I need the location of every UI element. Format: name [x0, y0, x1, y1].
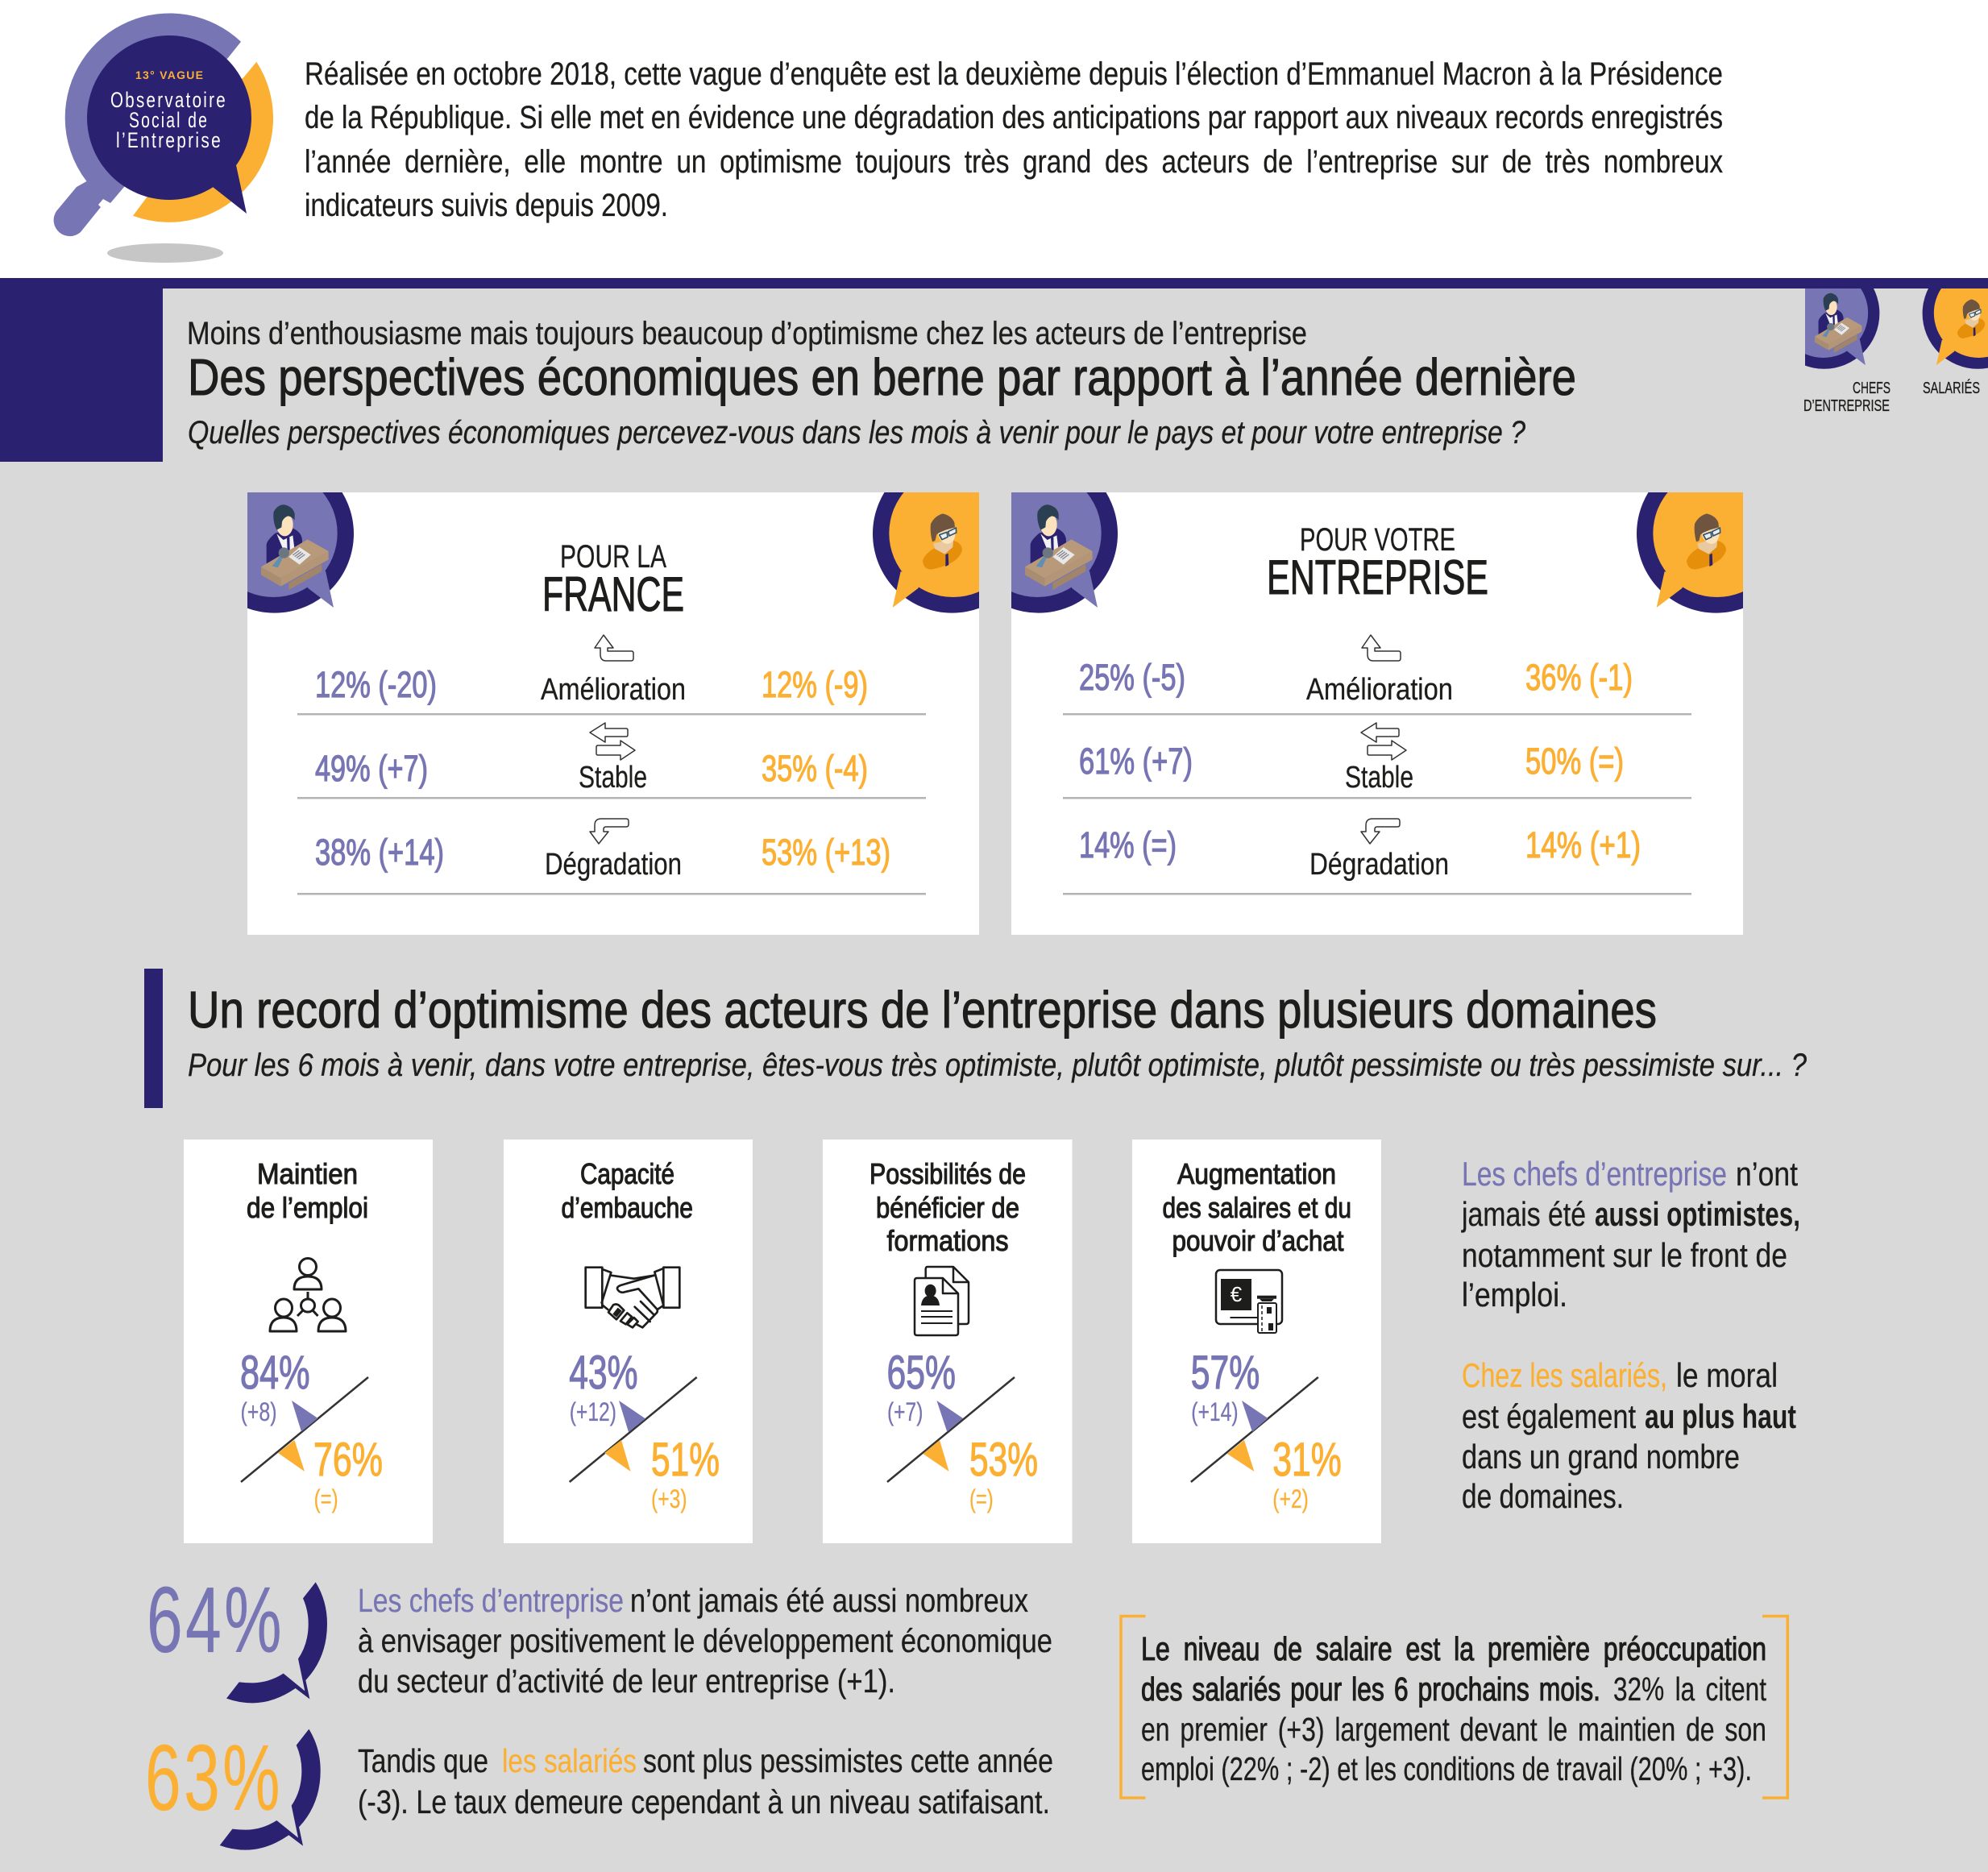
callout: niveau de salaire: en premier (+3) largement devant le maintien de son: [1141, 1711, 1766, 1748]
legend: salariés: [1923, 258, 1988, 397]
icon: handshake: [586, 1268, 679, 1327]
icon: salarié: [1637, 455, 1795, 613]
values: chefs vs salariés: (+2): [1272, 1484, 1309, 1513]
row: amélioration: [315, 635, 868, 707]
text block: commentary: jamais été: [1460, 1195, 1586, 1233]
card title: Capacité: [580, 1157, 674, 1190]
callout: niveau de salaire: Le niveau de salaire est la première préoccupation: [1141, 1630, 1766, 1667]
values: chefs vs salariés: (=): [314, 1484, 338, 1513]
icon: people network: [270, 1259, 346, 1331]
text block: commentary: est également: [1462, 1397, 1636, 1435]
row: dégradation: [315, 819, 890, 882]
values: chefs vs salariés: 57%: [1191, 1347, 1260, 1399]
callout: niveau de salaire: [1121, 1617, 1787, 1798]
legend: chefs d'entreprise: [1769, 258, 1890, 415]
row: amélioration: 12% (-9): [762, 664, 868, 705]
row: stable: Stable: [1345, 761, 1413, 795]
section heading: perspectives économiques: Des perspectives économiques en berne par rapport à l’année dernière: [188, 348, 1576, 406]
text block: chefs d'entreprise: à envisager positivement le développement économique: [358, 1622, 1052, 1659]
row: dégradation: Dégradation: [1309, 848, 1449, 882]
card: maintien de l'emploi: [184, 1139, 433, 1543]
panel: pour votre entreprise: [959, 455, 1795, 935]
section heading: perspectives économiques: Quelles perspectives économiques percevez-vous dans les mois à venir pour le pays et pour votre entreprise ?: [188, 415, 1526, 450]
section heading: record d'optimisme: [144, 969, 1807, 1108]
values: chefs vs salariés: 43%: [569, 1347, 638, 1399]
row: stable: 50% (=): [1525, 741, 1624, 782]
row: amélioration: Amélioration: [1306, 673, 1453, 707]
logo: Observatoire Social de l'Entreprise: 13° VAGUE: [135, 68, 203, 81]
values: chefs vs salariés: (=): [969, 1484, 994, 1513]
card title: [247, 1157, 368, 1224]
values: chefs vs salariés: (+12): [570, 1397, 616, 1426]
card title: Maintien: [257, 1157, 358, 1190]
values: chefs vs salariés: 76%: [313, 1434, 383, 1486]
text block: commentary: [1460, 1155, 1800, 1515]
row: amélioration: [1079, 635, 1633, 707]
panel heading: FRANCE: [542, 567, 684, 621]
card title: Possibilités de: [869, 1157, 1026, 1190]
logo: Observatoire Social de l'Entreprise: [54, 13, 273, 263]
row: stable: Stable: [579, 761, 647, 795]
panel heading: POUR VOTRE: [1300, 522, 1455, 558]
values: chefs vs salariés: [569, 1347, 720, 1513]
row: dégradation: 14% (=): [1079, 824, 1177, 865]
icon: salarié: [873, 455, 1031, 613]
text block: chefs d'entreprise: [358, 1582, 1052, 1700]
text block: salariés: [358, 1742, 1053, 1820]
card title: des salaires et du: [1162, 1191, 1351, 1224]
text block: commentary: aussi optimistes,: [1595, 1195, 1800, 1233]
intro text: [305, 56, 1723, 223]
row: dégradation: Dégradation: [545, 848, 682, 882]
values: chefs vs salariés: 51%: [651, 1434, 720, 1486]
card: possibilités de formations: [823, 1139, 1072, 1543]
logo: Observatoire Social de l'Entreprise: Social de: [129, 108, 209, 132]
panel heading: [542, 539, 684, 621]
intro text: l’année dernière, elle montre un optimisme toujours très grand des acteurs de l’entreprise sur de très nombreux: [305, 144, 1723, 180]
card title: [1162, 1157, 1351, 1257]
card title: Augmentation: [1177, 1157, 1336, 1190]
text block: commentary: Les chefs d’entreprise: [1462, 1155, 1727, 1193]
panel heading: ENTREPRISE: [1267, 550, 1488, 604]
text block: commentary: au plus haut: [1645, 1397, 1796, 1435]
text block: salariés: (-3). Le taux demeure cependant à un niveau satifaisant.: [358, 1783, 1050, 1820]
stat: 64%: 64%: [147, 1567, 284, 1672]
values: chefs vs salariés: (+14): [1191, 1397, 1239, 1426]
text block: chefs d'entreprise: Les chefs d’entreprise: [358, 1582, 624, 1619]
legend: chefs d'entreprise: CHEFS: [1853, 380, 1890, 397]
text block: commentary: Chez les salariés,: [1462, 1356, 1667, 1394]
text block: salariés: Tandis que: [358, 1742, 488, 1779]
values: chefs vs salariés: 31%: [1272, 1434, 1342, 1486]
text block: commentary: de domaines.: [1462, 1477, 1624, 1515]
values: chefs vs salariés: 53%: [969, 1434, 1038, 1486]
row: stable: [315, 723, 868, 795]
icon: CV documents: [915, 1267, 969, 1335]
row: dégradation: 53% (+13): [762, 832, 890, 873]
row: dégradation: 38% (+14): [315, 832, 444, 873]
row: amélioration: 25% (-5): [1079, 657, 1185, 698]
intro text: indicateurs suivis depuis 2009.: [305, 188, 668, 223]
text block: commentary: dans un grand nombre: [1462, 1438, 1740, 1476]
callout: niveau de salaire: emploi (22% ; -2) et les conditions de travail (20% ; +3).: [1141, 1750, 1752, 1787]
icon: payment terminal: €: [1231, 1282, 1243, 1306]
panel: pour la France: [195, 455, 1031, 935]
logo: Observatoire Social de l'Entreprise: l’Entreprise: [116, 128, 222, 152]
text block: salariés: sont plus pessimistes cette année: [643, 1742, 1053, 1779]
intro text: Réalisée en octobre 2018, cette vague d’enquête est la deuxième depuis l’élection d’Emmanuel Macron à la Présidence: [305, 56, 1723, 92]
row: amélioration: 12% (-20): [315, 664, 437, 705]
values: chefs vs salariés: [240, 1347, 383, 1513]
panel heading: POUR LA: [560, 539, 666, 575]
values: chefs vs salariés: [1191, 1347, 1342, 1513]
section heading: record d'optimisme: Un record d’optimisme des acteurs de l’entreprise dans plusieurs domaines: [188, 981, 1657, 1039]
callout: niveau de salaire: des salariés pour les 6 prochains mois.: [1141, 1671, 1600, 1708]
text block: commentary: l’emploi.: [1462, 1276, 1567, 1314]
values: chefs vs salariés: (+3): [651, 1484, 687, 1513]
panel heading: [1267, 522, 1488, 604]
card title: [869, 1157, 1026, 1257]
row: amélioration: 36% (-1): [1525, 657, 1633, 698]
icon: chef d'entreprise: [959, 455, 1118, 613]
text block: salariés: les salariés: [502, 1742, 637, 1779]
text block: commentary: notamment sur le front de: [1462, 1236, 1787, 1274]
row: dégradation: 14% (+1): [1525, 824, 1641, 865]
card title: formations: [886, 1224, 1009, 1257]
values: chefs vs salariés: [886, 1347, 1038, 1513]
icon: chef d'entreprise: [195, 455, 354, 613]
values: chefs vs salariés: (+7): [887, 1397, 923, 1426]
section heading: perspectives économiques: [187, 316, 1576, 450]
callout: niveau de salaire: 32% la citent: [1613, 1671, 1766, 1708]
row: amélioration: Amélioration: [541, 673, 686, 707]
icon: payment terminal: [1216, 1270, 1282, 1333]
row: stable: [1079, 723, 1624, 795]
card: capacité d'embauche: [504, 1139, 753, 1543]
card title: de l’emploi: [247, 1191, 368, 1224]
text block: chefs d'entreprise: n’ont jamais été aussi nombreux: [630, 1582, 1028, 1619]
card title: d’embauche: [561, 1191, 693, 1224]
text block: commentary: n’ont: [1736, 1155, 1798, 1193]
legend: chefs d'entreprise: D’ENTREPRISE: [1803, 397, 1890, 415]
card title: bénéficier de: [876, 1191, 1019, 1224]
text block: commentary: le moral: [1676, 1356, 1778, 1394]
values: chefs vs salariés: 65%: [886, 1347, 956, 1399]
row: stable: 35% (-4): [762, 748, 868, 789]
stat: 63%: 63%: [145, 1725, 283, 1830]
row: stable: 49% (+7): [315, 748, 428, 789]
values: chefs vs salariés: 84%: [240, 1347, 309, 1399]
card title: pouvoir d’achat: [1172, 1224, 1344, 1257]
row: dégradation: [1079, 819, 1641, 882]
intro text: de la République. Si elle met en évidence une dégradation des anticipations par rapport aux niveaux records enregistrés: [305, 100, 1723, 135]
values: chefs vs salariés: (+8): [240, 1397, 277, 1426]
text block: chefs d'entreprise: du secteur d’activité de leur entreprise (+1).: [358, 1662, 895, 1700]
row: stable: 61% (+7): [1079, 741, 1193, 782]
card: augmentation des salaires: [1132, 1139, 1381, 1543]
section heading: perspectives économiques: Moins d’enthousiasme mais toujours beaucoup d’optimisme chez les acteurs de l’entreprise: [187, 316, 1307, 351]
logo: Observatoire Social de l'Entreprise: Observatoire: [110, 88, 227, 112]
card title: [561, 1157, 693, 1224]
